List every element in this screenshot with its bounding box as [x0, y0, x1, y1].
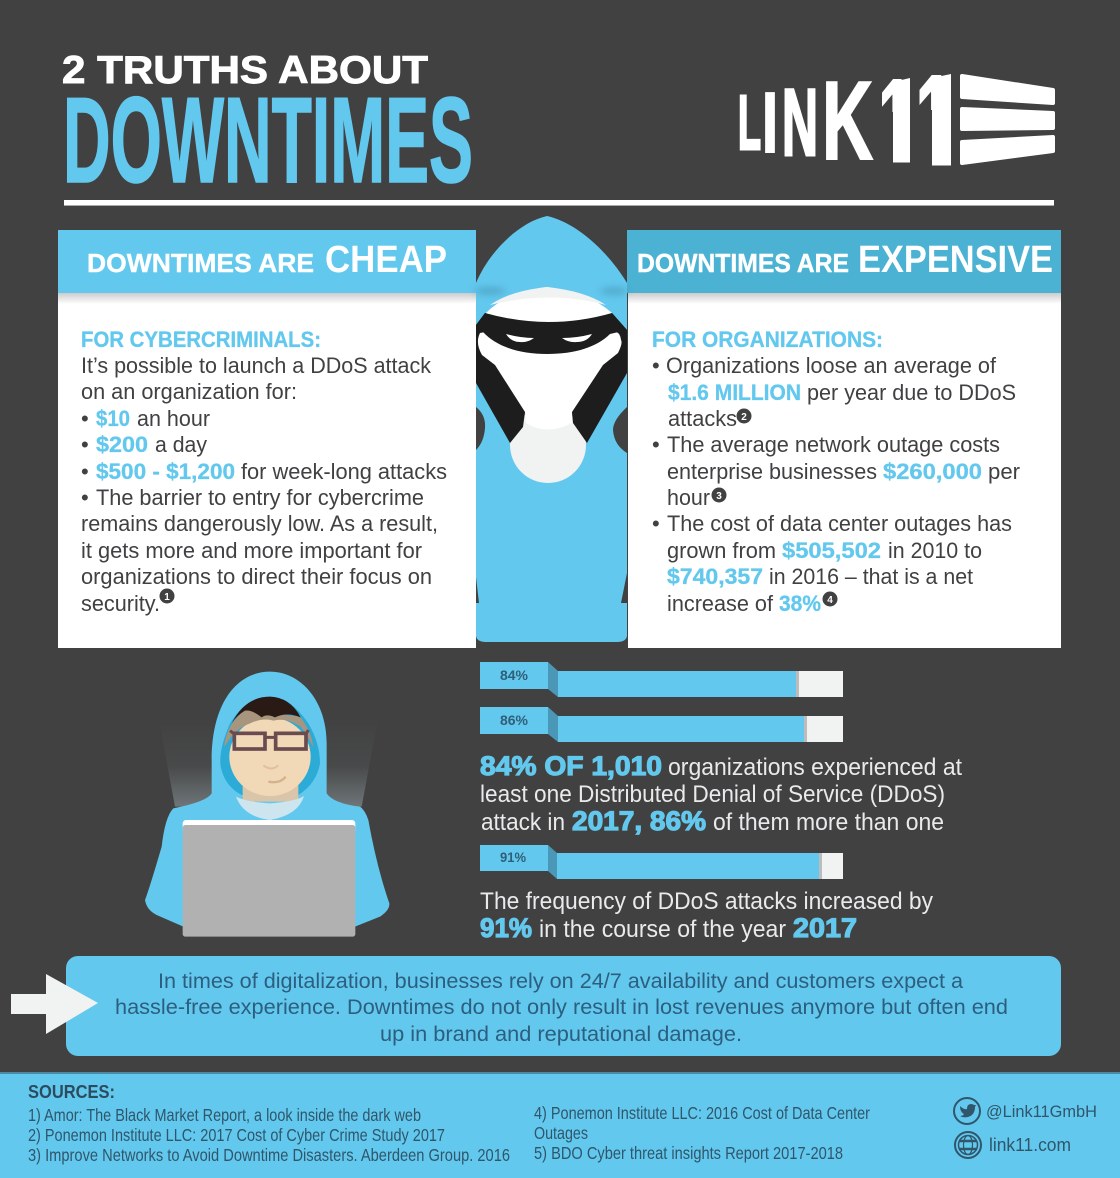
callout	[66, 956, 1061, 1056]
title	[62, 49, 473, 208]
icon: masked hooded figure	[474, 216, 628, 642]
logo: Link11: 1	[878, 54, 913, 188]
text block: sources column 1: 2) Ponemon Institute LLC: 2017 Cost of Cyber Crime Study 2017	[28, 1125, 445, 1145]
icon: twitter	[954, 1098, 980, 1124]
text block: sources column 2: 4) Ponemon Institute LLC: 2016 Cost of Data Center	[534, 1103, 870, 1123]
text block: for organizations: $740,357	[667, 564, 763, 589]
text block: 84% of 1,010 organizations: least one Distributed Denial of Service (DDoS)	[480, 781, 945, 808]
bar chart: 91%	[480, 845, 843, 879]
text block: sources column 1	[28, 1105, 510, 1165]
text block: for organizations: per year due to DDoS	[807, 380, 1016, 405]
text block: for cybercriminals: an hour	[137, 406, 210, 431]
bar chart: 91%: 91%	[500, 850, 526, 865]
text block: for organizations: The cost of data center outages has	[667, 511, 1012, 536]
text block: for organizations: 38%	[779, 591, 821, 616]
text block: frequency of attacks: 2017	[793, 913, 857, 943]
text block: for cybercriminals: security.	[81, 591, 160, 616]
title line: downtimes: DOWNTIMES	[63, 72, 473, 208]
panel header: cheap	[58, 230, 476, 293]
logo: Link11: L	[738, 80, 761, 166]
text block: for organizations: •	[652, 511, 660, 536]
text block: 84% of 1,010 organizations	[480, 751, 962, 836]
logo: Link11: N	[782, 70, 818, 176]
heading: sources: SOURCES:	[28, 1082, 115, 1102]
panel header: expensive: EXPENSIVE	[858, 239, 1053, 281]
text block: for cybercriminals: •	[81, 485, 89, 510]
text block: for cybercriminals: 1	[164, 592, 170, 603]
text block: for organizations: Organizations loose an average of	[666, 353, 997, 378]
text block: 84% of 1,010 organizations: 84% OF 1,010	[480, 751, 662, 781]
text block: for cybercriminals: it gets more and more important for	[81, 538, 422, 563]
text block: for organizations: in 2016 – that is a net	[769, 564, 973, 589]
text block: for organizations: •	[652, 432, 660, 457]
callout: hassle-free experience. Downtimes do not only result in lost revenues anymore but often end	[115, 995, 1008, 1019]
text block: frequency of attacks: 91%	[480, 913, 532, 943]
text block: for organizations: increase of	[667, 591, 774, 616]
bar chart: 86%: 86%	[500, 713, 528, 728]
text block: sources column 2	[534, 1103, 870, 1163]
text block: for cybercriminals: The barrier to entry for cybercrime	[96, 485, 424, 510]
panel: downtimes are expensive	[627, 230, 1061, 648]
text block: for cybercriminals: FOR CYBERCRIMINALS:	[81, 327, 321, 352]
callout: In times of digitalization, businesses rely on 24/7 availability and customers expect a	[158, 969, 963, 993]
text block: for organizations: $260,000	[883, 459, 982, 484]
text block: for cybercriminals: $200	[96, 432, 148, 457]
text block: for cybercriminals: •	[81, 459, 89, 484]
text block: for organizations: 4	[827, 595, 833, 606]
logo: Link11: K	[822, 59, 873, 183]
panel header: cheap: CHEAP	[325, 239, 447, 281]
text block: for cybercriminals: •	[81, 406, 89, 431]
text block: for cybercriminals: organizations to direct their focus on	[81, 564, 432, 589]
panel header: expensive: DOWNTIMES ARE	[637, 248, 849, 278]
text block: for cybercriminals: remains dangerously low. As a result,	[81, 511, 438, 536]
text block: frequency of attacks: in the course of the year	[539, 916, 786, 943]
text block: for organizations: FOR ORGANIZATIONS:	[652, 327, 883, 352]
logo: Link11: 1	[915, 47, 954, 193]
text block: sources column 2: 5) BDO Cyber threat insights Report 2017-2018	[534, 1143, 843, 1163]
icon: hacker with laptop	[145, 672, 389, 937]
text block: for cybercriminals: a day	[155, 432, 207, 457]
arrow	[11, 974, 98, 1034]
text block: for organizations: enterprise businesses	[667, 459, 877, 484]
panel: downtimes are cheap	[58, 230, 476, 648]
text block: for cybercriminals: $500 - $1,200	[96, 459, 235, 484]
panel header: expensive	[627, 230, 1061, 293]
text block: for organizations: hour	[667, 485, 710, 510]
text block: for cybercriminals: $10	[96, 406, 130, 431]
handle: twitter: @Link11GmbH	[986, 1102, 1097, 1121]
text block: 84% of 1,010 organizations: of them more than one	[713, 809, 944, 836]
text block: for organizations: in 2010 to	[888, 538, 982, 563]
bar chart: 84%: 84%	[500, 668, 528, 683]
text block: for organizations: attacks	[668, 406, 737, 431]
website: link11.com	[989, 1135, 1071, 1155]
text block: 84% of 1,010 organizations: attack in	[481, 809, 565, 836]
text block: for organizations: 3	[716, 491, 722, 502]
text block: sources column 2: Outages	[534, 1123, 588, 1143]
text block: for cybercriminals	[81, 327, 447, 616]
text block: 84% of 1,010 organizations: 2017, 86%	[572, 806, 706, 836]
text block: sources column 1: 1) Amor: The Black Market Report, a look inside the dark web	[28, 1105, 421, 1125]
text block: for organizations: $1.6 MILLION	[668, 380, 801, 405]
text block: frequency of attacks: The frequency of DDoS attacks increased by	[480, 888, 933, 915]
text block: frequency of attacks	[480, 888, 933, 943]
callout: up in brand and reputational damage.	[380, 1022, 742, 1046]
text block: for organizations: per	[988, 459, 1020, 484]
text block: sources column 1: 3) Improve Networks to Avoid Downtime Disasters. Aberdeen Group. 2016	[28, 1145, 510, 1165]
text block: for organizations: $505,502	[782, 538, 881, 563]
text block: for organizations: grown from	[667, 538, 776, 563]
text block: for cybercriminals: on an organization for:	[81, 379, 297, 404]
text block: for cybercriminals: It’s possible to launch a DDoS attack	[81, 353, 432, 378]
text block: 84% of 1,010 organizations: organizations experienced at	[668, 754, 962, 781]
text block: for cybercriminals: •	[81, 432, 89, 457]
text block: for organizations: 2	[741, 412, 747, 423]
bar chart: 86%	[480, 707, 843, 742]
panel header: cheap: DOWNTIMES ARE	[87, 248, 314, 278]
bar chart: 84%	[480, 662, 843, 697]
text block: for organizations	[652, 327, 1020, 616]
text block: for organizations: •	[652, 353, 660, 378]
logo: Link11	[738, 47, 1053, 193]
logo: Link11: I	[763, 76, 777, 169]
text block: for organizations: The average network outage costs	[667, 432, 1000, 457]
panel: footer sources	[0, 1072, 1120, 1178]
icon: globe	[955, 1132, 981, 1158]
text block: for cybercriminals: for week-long attacks	[241, 459, 447, 484]
title line: 2 truths about: 2 TRUTHS ABOUT	[62, 49, 428, 92]
